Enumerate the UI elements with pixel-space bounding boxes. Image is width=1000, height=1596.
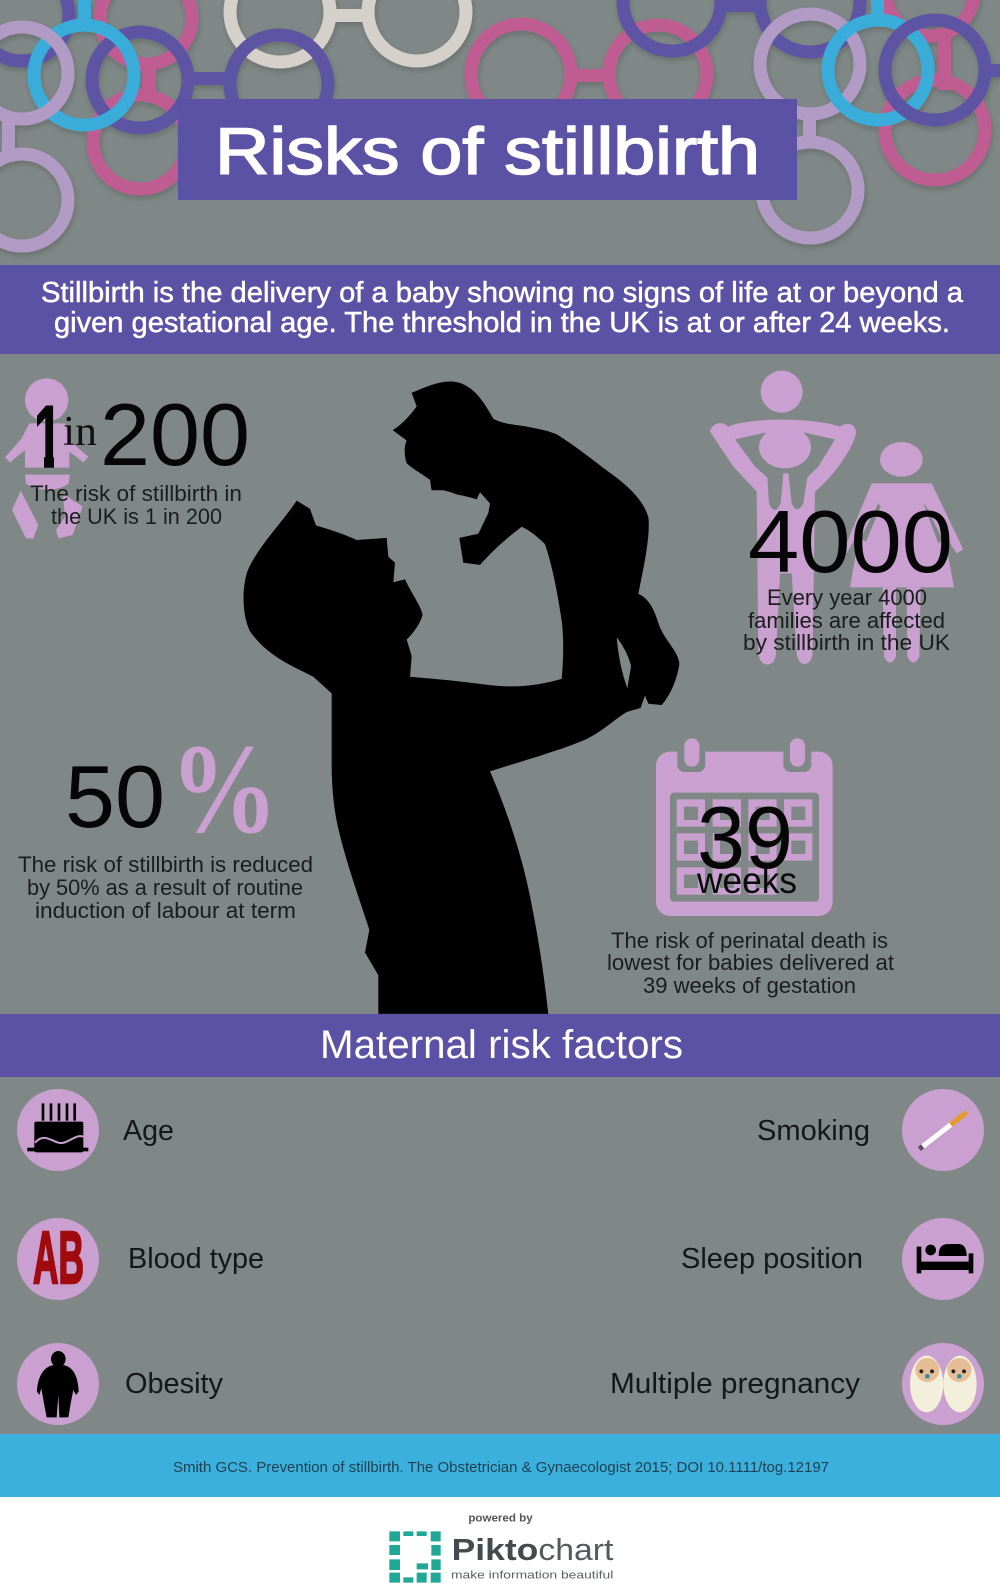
stat: 4000 families: 4000 — [748, 492, 953, 591]
stat: 39 weeks — [607, 730, 894, 998]
stat: 4000 families: by stillbirth in the UK — [743, 630, 950, 655]
intro definition band: given gestational age. The threshold in the UK is at or after 24 weeks. — [54, 307, 950, 339]
stat: 39 weeks: 39 weeks of gestation — [643, 973, 856, 998]
risk factor: blood type — [17, 1216, 264, 1300]
risk factor: multiple pregnancy — [610, 1343, 984, 1425]
risk factor: sleep position — [681, 1218, 984, 1300]
title — [178, 99, 797, 200]
risk factor: multiple pregnancy: Multiple pregnancy — [610, 1368, 861, 1400]
risk factor: age: Age — [123, 1115, 174, 1147]
stat: 50 percent: by 50% as a result of routine — [27, 875, 303, 900]
icon: birthday cake — [27, 1103, 88, 1152]
stat: 4000 families: families are affected — [748, 608, 945, 633]
piktochart logo: Pikto — [452, 1533, 538, 1567]
icon: cigarette — [919, 1112, 967, 1149]
icon: obese person — [37, 1351, 79, 1417]
icon: parent and child figures — [710, 371, 963, 665]
stat: 50 percent: induction of labour at term — [35, 898, 296, 923]
risk factor: obesity: Obesity — [125, 1368, 223, 1400]
stat: 1 in 200: 200 — [100, 385, 250, 484]
risk factor: blood type: Blood type — [128, 1243, 264, 1275]
stat: 39 weeks: weeks — [696, 860, 797, 901]
piktochart logo: make information beautiful — [451, 1570, 613, 1582]
stat: 39 weeks: The risk of perinatal death is — [611, 928, 888, 953]
stat: 4000 families — [710, 371, 963, 665]
silhouette: father lifting baby — [244, 381, 679, 1014]
icon: calendar — [656, 730, 833, 916]
icon: baby figure — [5, 378, 88, 538]
stat: 1 in 200: in — [63, 409, 97, 455]
piktochart logo — [0, 1497, 1000, 1596]
risk factor: smoking — [757, 1089, 984, 1171]
piktochart logo: chart — [538, 1533, 614, 1567]
title: Risks of stillbirth — [215, 114, 760, 188]
heading band: maternal risk factors — [0, 1014, 1000, 1077]
risk factor: smoking: Smoking — [757, 1115, 870, 1147]
heading band: maternal risk factors: Maternal risk factors — [320, 1023, 683, 1067]
icon: piktochart mark — [389, 1531, 441, 1583]
piktochart logo: powered by — [468, 1513, 534, 1525]
stat: 39 weeks: 39 — [697, 788, 793, 887]
stat: 1 in 200: 1 — [34, 387, 62, 486]
reference footer: Smith GCS. Prevention of stillbirth. The Obstetrician & Gynaecologist 2015; DOI 10.1111/tog.12197 — [173, 1459, 829, 1476]
intro definition band: Stillbirth is the delivery of a baby showing no signs of life at or beyond a — [41, 277, 964, 309]
icon: twin babies — [910, 1356, 977, 1412]
stat: 50 percent — [18, 718, 313, 923]
stat: 4000 families: Every year 4000 — [767, 585, 927, 610]
risk factor: blood type: AB — [33, 1216, 84, 1299]
risk factor: obesity — [17, 1343, 223, 1425]
decorative rings header background — [0, 0, 1000, 246]
stat: 1 in 200: the UK is 1 in 200 — [51, 504, 222, 529]
stat: 50 percent: The risk of stillbirth is reduced — [18, 852, 313, 877]
stat: 50 percent: % — [170, 718, 278, 860]
stat: 39 weeks: lowest for babies delivered at — [607, 950, 894, 975]
reference footer — [0, 1434, 1000, 1497]
risk factor: sleep position: Sleep position — [681, 1243, 863, 1275]
icon: bed — [917, 1244, 973, 1273]
stat: 50 percent: 50 — [65, 747, 165, 846]
risk factor: age — [17, 1089, 174, 1171]
stat: 1 in 200 — [5, 378, 250, 538]
stat: 1 in 200: The risk of stillbirth in — [30, 481, 242, 506]
intro definition band — [0, 265, 1000, 354]
